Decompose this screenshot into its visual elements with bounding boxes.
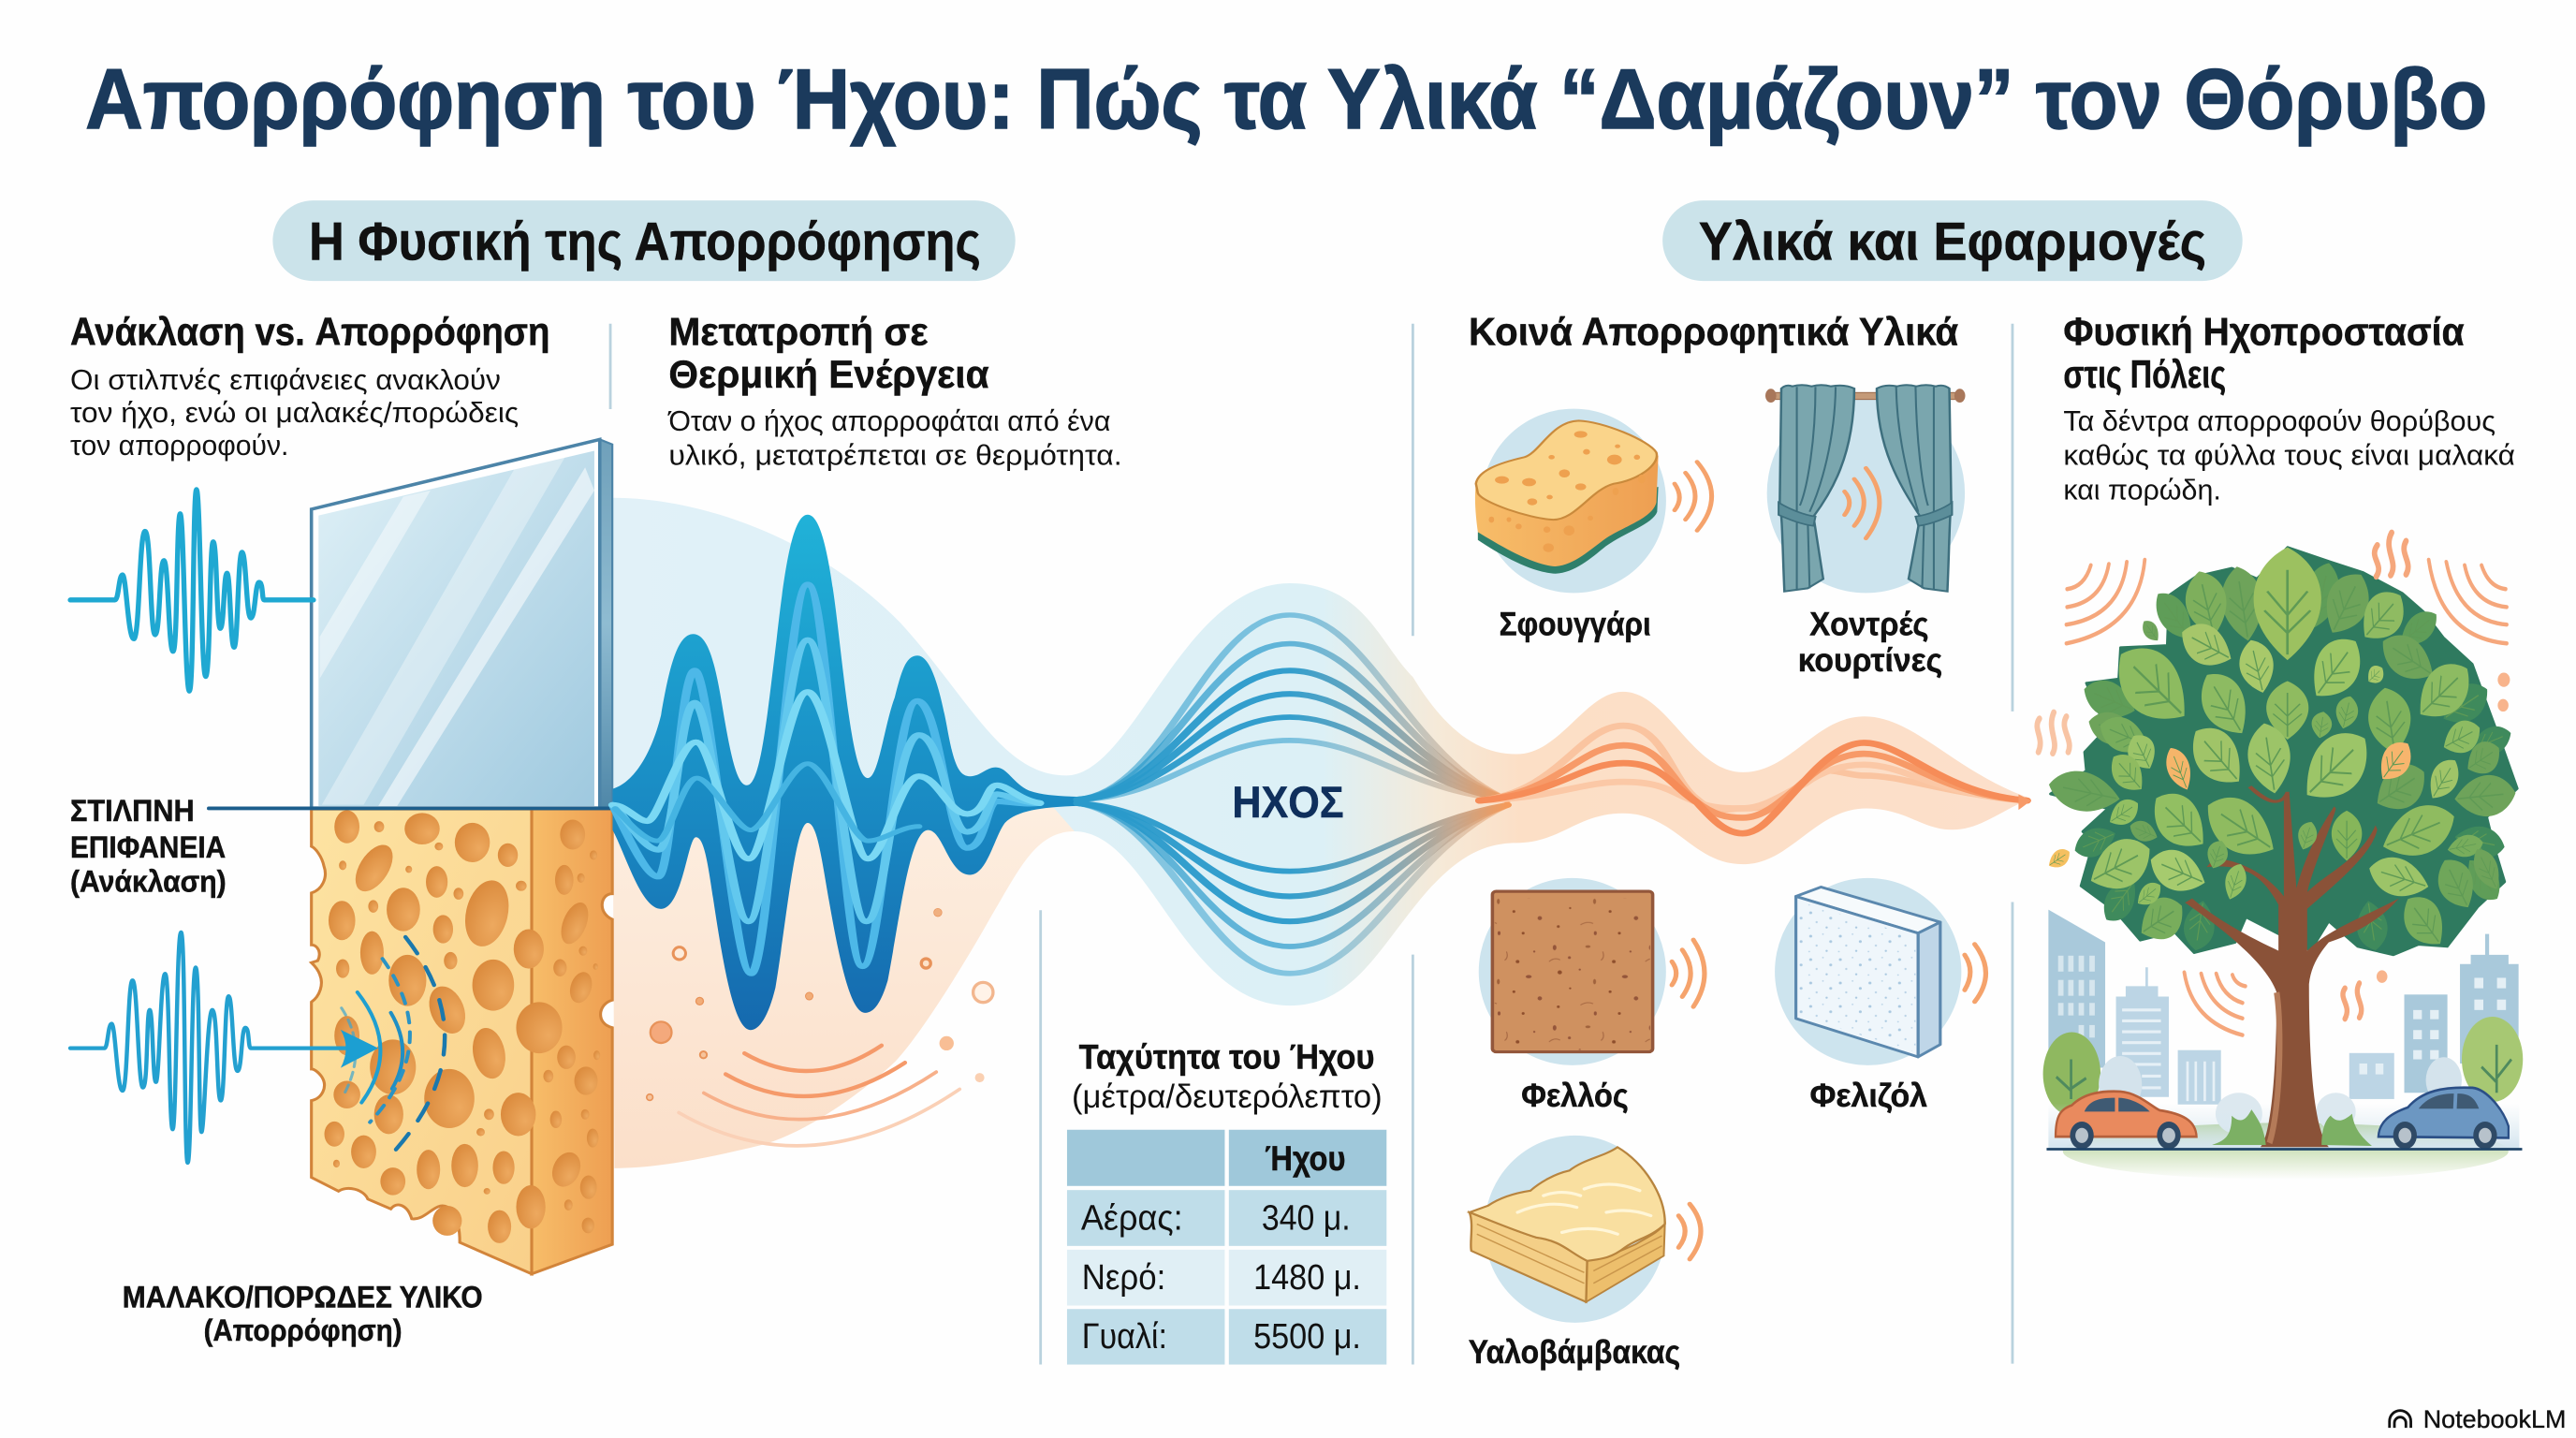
- inner wave lines: [612, 584, 1040, 974]
- icon: sponge: [1475, 409, 1712, 593]
- wave label: ΗΧΟΣ: [1232, 778, 1344, 828]
- label: sponge: Σφουγγάρι: [1500, 606, 1651, 642]
- label: thick curtains: Χοντρές: [1809, 606, 1928, 642]
- tree canopy base: [2050, 548, 2517, 955]
- table text: 1480 μ.: [1253, 1257, 1361, 1297]
- lens of blue-to-orange wave lines: [1077, 615, 1507, 974]
- label: thick curtains: [1798, 606, 1942, 679]
- heading: common absorbent materials: Κοινά Απορροφητικά Υλικά: [1469, 310, 1958, 354]
- label: shiny surface: ΣΤΙΛΠΝΗ: [70, 794, 195, 828]
- main blue sound wave: [612, 515, 1507, 1030]
- table cells: [1067, 1130, 1386, 1365]
- porous sponge block: soft material: [312, 809, 612, 1274]
- glass panel: reflective surface: [312, 439, 612, 808]
- heat bubbles and arcs: [647, 908, 993, 1146]
- incoming wave: reflection: [70, 490, 314, 691]
- fading arcs: [679, 1046, 959, 1146]
- table text: 340 μ.: [1262, 1197, 1351, 1237]
- city buildings: [2048, 910, 2519, 1105]
- surface divider line: [209, 807, 611, 810]
- sponge pores: [325, 810, 600, 1243]
- illustration: tree in the city: [2037, 533, 2523, 1180]
- block: natural soundproofing in cities: Τα δέντρα απορροφούν θορύβους: [2063, 404, 2496, 437]
- absorbed sound arcs inside sponge: [342, 937, 445, 1151]
- section pill: materials: [1662, 200, 2243, 281]
- label: soft porous material: ΜΑΛΑΚΟ/ΠΟΡΩΔΕΣ ΥΛΙΚΟ: [123, 1280, 483, 1313]
- table text: 5500 μ.: [1253, 1316, 1361, 1356]
- city greenery and haze: [2043, 1017, 2523, 1149]
- block: reflection vs absorption: [70, 310, 549, 462]
- table unit: (μέτρα/δευτερόλεπτο): [1072, 1078, 1383, 1115]
- arrowhead: [341, 1030, 378, 1068]
- icon: glass wool: [1470, 1136, 1701, 1323]
- table text: Ήχου: [1265, 1139, 1345, 1178]
- NotebookLM logo: NotebookLM: [2423, 1404, 2566, 1433]
- bubbles: [647, 908, 993, 1100]
- back leaves: [2046, 548, 2517, 957]
- icon: cork: [1479, 878, 1705, 1065]
- block: conversion to heat: υλικό, μετατρέπεται σε θερμότητα.: [668, 439, 1122, 472]
- label: soft porous material: (Απορρόφηση): [204, 1313, 402, 1347]
- ground: [2063, 1123, 2509, 1180]
- sponge side face: [532, 809, 612, 1274]
- block: reflection vs absorption: τον απορροφούν.: [70, 429, 288, 462]
- block: natural soundproofing in cities: και πορώδη.: [2063, 474, 2221, 506]
- table text: Νερό:: [1082, 1257, 1165, 1297]
- tree trunk and branches: [2185, 785, 2399, 1147]
- section pill: physics: Η Φυσική της Απορρόφησης: [309, 212, 981, 271]
- table heading: Ταχύτητα του Ήχου: [1079, 1038, 1374, 1077]
- table text: Γυαλί:: [1082, 1316, 1167, 1356]
- block: natural soundproofing in cities: καθώς τα φύλλα τους είναι μαλακά: [2063, 439, 2515, 472]
- label: shiny surface: [70, 794, 227, 898]
- label: glass wool: Υαλοβάμβακας: [1469, 1334, 1680, 1371]
- section pill: materials: Υλικά και Εφαρμογές: [1699, 212, 2206, 271]
- block: reflection vs absorption: Οι στιλπνές επιφάνειες ανακλούν: [70, 363, 501, 396]
- block: reflection vs absorption: τον ήχο, ενώ οι μαλακές/πορώδεις: [70, 396, 519, 429]
- label: thick curtains: κουρτίνες: [1798, 642, 1942, 679]
- block: conversion to heat: Θερμική Ενέργεια: [668, 352, 989, 396]
- label: soft porous material: [123, 1280, 483, 1347]
- block: natural soundproofing in cities: [2063, 310, 2515, 506]
- label: cork: Φελλός: [1521, 1078, 1629, 1114]
- sound arcs around tree: [2037, 533, 2507, 1035]
- block: conversion to heat: Μετατροπή σε: [668, 310, 929, 354]
- block: natural soundproofing in cities: στις Πόλεις: [2063, 352, 2226, 396]
- incoming wave with arrow: absorption: [70, 932, 378, 1163]
- sponge front face: [312, 809, 532, 1274]
- section pill: physics: [272, 200, 1016, 281]
- blue car: [2378, 1088, 2509, 1150]
- icon: curtains: [1765, 385, 1966, 593]
- block: conversion to heat: [666, 310, 1122, 472]
- dots: [2377, 673, 2510, 983]
- sound wave background envelope: [613, 498, 2030, 1168]
- table text: [1081, 1139, 1361, 1356]
- dividers: [610, 324, 2012, 1365]
- front leaves: [2133, 717, 2461, 911]
- orange attenuated wave lines: [1479, 726, 2031, 833]
- icon: styrofoam: [1775, 878, 1985, 1065]
- road line: [2046, 1147, 2522, 1152]
- label: styrofoam: Φελιζόλ: [1810, 1078, 1927, 1114]
- label: shiny surface: ΕΠΙΦΑΝΕΙΑ: [70, 830, 226, 864]
- orange car: [2056, 1092, 2197, 1150]
- block: conversion to heat: Όταν ο ήχος απορροφάται από ένα: [666, 404, 1110, 437]
- label: shiny surface: (Ανάκλαση): [70, 864, 227, 898]
- block: natural soundproofing in cities: Φυσική Ηχοπροστασία: [2063, 310, 2465, 354]
- bushes at base: [2212, 1109, 2372, 1146]
- speed of sound table: [1067, 1038, 1386, 1365]
- orange accent leaves: [2045, 616, 2419, 873]
- table text: Αέρας:: [1081, 1197, 1183, 1237]
- block: reflection vs absorption: Ανάκλαση vs. Απορρόφηση: [70, 310, 549, 354]
